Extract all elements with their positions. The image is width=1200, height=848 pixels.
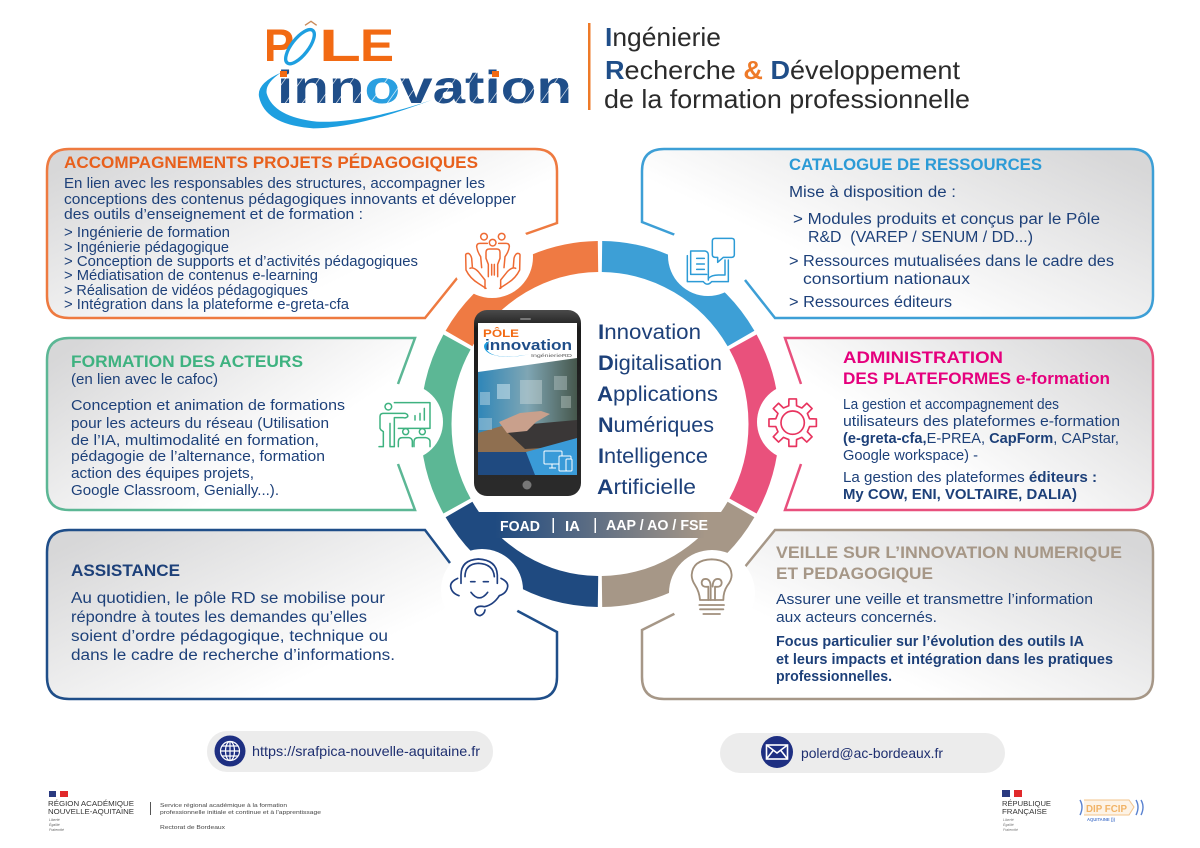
logo word PÔLE: L	[319, 20, 361, 71]
email address: polerd@ac-bordeaux.fr	[801, 745, 943, 761]
icon: globe	[214, 736, 246, 766]
body text: La gestion des plateformes éditeurs :	[843, 470, 1097, 486]
body text	[789, 184, 1114, 311]
ring segment tan	[602, 510, 741, 592]
ring segment navy	[459, 510, 598, 592]
footer: region academique: Fraternité	[49, 828, 64, 832]
icon: trainer at board	[379, 403, 430, 447]
header divider	[588, 23, 590, 110]
phone photo	[478, 358, 577, 452]
body text: Google workspace) -	[843, 448, 978, 464]
body text: soient d’ordre pédagogique, technique ou	[71, 628, 388, 645]
body text: Assurer une veille et transmettre l’information	[776, 592, 1093, 608]
body text: Mise à disposition de :	[789, 184, 956, 201]
body text: > Modules produits et conçus par le Pôle	[793, 211, 1100, 228]
body text: La gestion et accompagnement des	[843, 397, 1059, 413]
body text: pour les acteurs du réseau (Utilisation	[71, 416, 329, 432]
footer: region academique: NOUVELLE-AQUITAINE	[48, 809, 134, 816]
footer: region academique: Égalité	[49, 822, 60, 827]
body text: aux acteurs concernés.	[776, 610, 937, 626]
heading	[843, 348, 1110, 388]
intro text: En lien avec les responsables des structures, accompagner les	[64, 176, 485, 192]
panel: catalogue de ressources	[642, 149, 1153, 318]
footer: region academique: Service régional académique à la formation	[160, 803, 287, 809]
body text: utilisateurs des plateformes e-formation	[843, 414, 1120, 430]
panel: veille sur l'innovation	[642, 530, 1153, 699]
heading	[776, 543, 1122, 583]
panel: accompagnements projets pedagogiques	[47, 149, 557, 318]
central acronym words: Intelligence	[598, 445, 708, 468]
band: FOAD IA AAP: FOAD	[500, 519, 540, 535]
header title: Ingénierie	[605, 22, 721, 52]
footer: region academique: professionnelle initiale et continue et à l'apprentissage	[160, 810, 321, 816]
list of services: > Intégration dans la plateforme e-greta-cfa	[64, 297, 350, 313]
body text: action des équipes projets,	[71, 466, 254, 482]
central acronym words: Digitalisation	[598, 352, 722, 375]
icon: light bulb	[692, 559, 732, 614]
footer: republique francaise: Liberté	[1003, 818, 1014, 822]
central acronym words: Innovation	[598, 321, 701, 344]
heading: ACCOMPAGNEMENTS PROJETS PÉDAGOGIQUES	[64, 153, 478, 172]
heading: CATALOGUE DE RESSOURCES	[789, 155, 1042, 174]
body text	[71, 590, 395, 664]
list of services: > Médiatisation de contenus e-learning	[64, 268, 318, 284]
central acronym words: Applications	[597, 383, 718, 406]
body text: Au quotidien, le pôle RD se mobilise pour	[71, 590, 385, 607]
logo swoosh	[259, 73, 432, 128]
body text: > Ressources éditeurs	[789, 294, 952, 311]
heading: ASSISTANCE	[71, 561, 180, 580]
body text: professionnelles.	[776, 669, 892, 685]
footer: DIP FCIP logo: DIP FCIP	[1086, 804, 1127, 815]
body text: Google Classroom, Genially...).	[71, 483, 279, 499]
intro text: des outils d’enseignement et de formation :	[64, 207, 363, 223]
heading: VEILLE SUR L’INNOVATION NUMERIQUE	[776, 543, 1122, 562]
phone bottom banner	[478, 438, 577, 475]
header title: Recherche & Développement	[605, 55, 961, 85]
logo word PÔLE	[264, 20, 394, 71]
icon backdrops	[367, 216, 833, 636]
footer: republique francaise	[1002, 790, 1051, 832]
list of services: > Ingénierie pédagogique	[64, 240, 229, 256]
heading: FORMATION DES ACTEURS	[71, 352, 303, 371]
footer: region academique: RÉGION ACADÉMIQUE	[48, 799, 134, 808]
central ring	[436, 256, 764, 592]
band: FOAD IA AAP	[468, 512, 732, 538]
body text	[71, 372, 345, 499]
heading: DES PLATEFORMES e-formation	[843, 369, 1110, 388]
phone logo: IngénierieRD	[531, 353, 573, 358]
footer: republique francaise: Égalité	[1003, 822, 1014, 827]
logo word PÔLE: P	[264, 20, 294, 71]
body text: > Ressources mutualisées dans le cadre des	[789, 253, 1114, 270]
footer: republique francaise: Fraternité	[1003, 828, 1018, 832]
link pill: email	[720, 733, 1005, 773]
phone logo: innovation	[485, 337, 572, 354]
phone screen	[478, 323, 577, 475]
ring segment orange	[459, 256, 598, 338]
body text: Focus particulier sur l’évolution des outils IA	[776, 634, 1085, 650]
intro text	[64, 176, 516, 223]
header title: de la formation professionnelle	[604, 84, 970, 114]
phone home button	[522, 480, 532, 490]
central acronym words: Numériques	[598, 414, 714, 437]
footer: DIP FCIP logo	[1080, 800, 1143, 822]
body text: My COW, ENI, VOLTAIRE, DALIA)	[843, 487, 1077, 503]
body text: de l’IA, multimodalité en formation,	[71, 433, 319, 449]
body text: et leurs impacts et intégration dans les pratiques	[776, 652, 1113, 668]
body text: (en lien avec le cafoc)	[71, 372, 218, 388]
panel: administration des plateformes	[785, 338, 1153, 510]
website address: https://srafpica-nouvelle-aquitaine.fr	[252, 743, 480, 759]
central acronym words: Artificielle	[597, 476, 696, 499]
ring segment green	[436, 342, 457, 506]
intro text: conceptions des contenus pédagogiques innovants et développer	[64, 192, 516, 208]
phone logo	[483, 327, 573, 358]
central acronym words	[597, 321, 722, 499]
logo: Pôle innovation	[259, 20, 572, 128]
heading: ADMINISTRATION	[843, 348, 1003, 367]
ring segment blue	[602, 256, 741, 338]
logo word PÔLE: E	[360, 20, 394, 71]
band: FOAD IA AAP: IA	[565, 519, 581, 535]
panel: formation des acteurs	[47, 338, 415, 510]
header title	[604, 22, 970, 114]
panel: assistance	[47, 530, 557, 699]
link pill: website	[207, 731, 493, 772]
phone logo: PÔLE	[483, 327, 519, 340]
list of services: > Réalisation de vidéos pédagogiques	[64, 283, 308, 299]
body text: répondre à toutes les demandes qu’elles	[71, 609, 367, 626]
body text: dans le cadre de recherche d’informations.	[71, 647, 395, 664]
icon: gear	[769, 399, 816, 446]
body text: consortium nationaux	[803, 271, 970, 288]
footer: region academique	[48, 791, 321, 832]
icon: headset assistant	[451, 559, 508, 616]
footer: region academique: Rectorat de Bordeaux	[160, 825, 225, 831]
logo ring and circumflex	[281, 21, 319, 68]
icon: book and speech bubble	[687, 238, 734, 284]
logo word innovation: inn ovation	[277, 61, 572, 113]
footer: republique francaise: FRANÇAISE	[1002, 809, 1047, 816]
phone mockup	[474, 310, 581, 496]
body text	[776, 592, 1113, 685]
list of services: > Conception de supports et d’activités pédagogiques	[64, 254, 418, 270]
body text: pédagogie de l’alternance, formation	[71, 449, 325, 465]
body text: (e-greta-cfa,E-PREA, CapForm, CAPstar,	[843, 431, 1119, 447]
icon: people in hands	[466, 233, 520, 288]
body text: R&D (VAREP / SENUM / DD...)	[808, 229, 1033, 246]
footer: republique francaise: RÉPUBLIQUE	[1002, 799, 1051, 808]
list of services	[64, 225, 418, 313]
list of services: > Ingénierie de formation	[64, 225, 230, 241]
icon: envelope	[761, 736, 793, 768]
footer: region academique: Liberté	[49, 818, 60, 822]
body text: Conception et animation de formations	[71, 398, 345, 414]
band: FOAD IA AAP: AAP / AO / FSE	[606, 518, 708, 534]
ring segment pink	[743, 342, 764, 506]
footer: DIP FCIP logo: AQUITAINE )))	[1087, 817, 1115, 822]
heading: ET PEDAGOGIQUE	[776, 564, 933, 583]
body text	[843, 397, 1120, 503]
